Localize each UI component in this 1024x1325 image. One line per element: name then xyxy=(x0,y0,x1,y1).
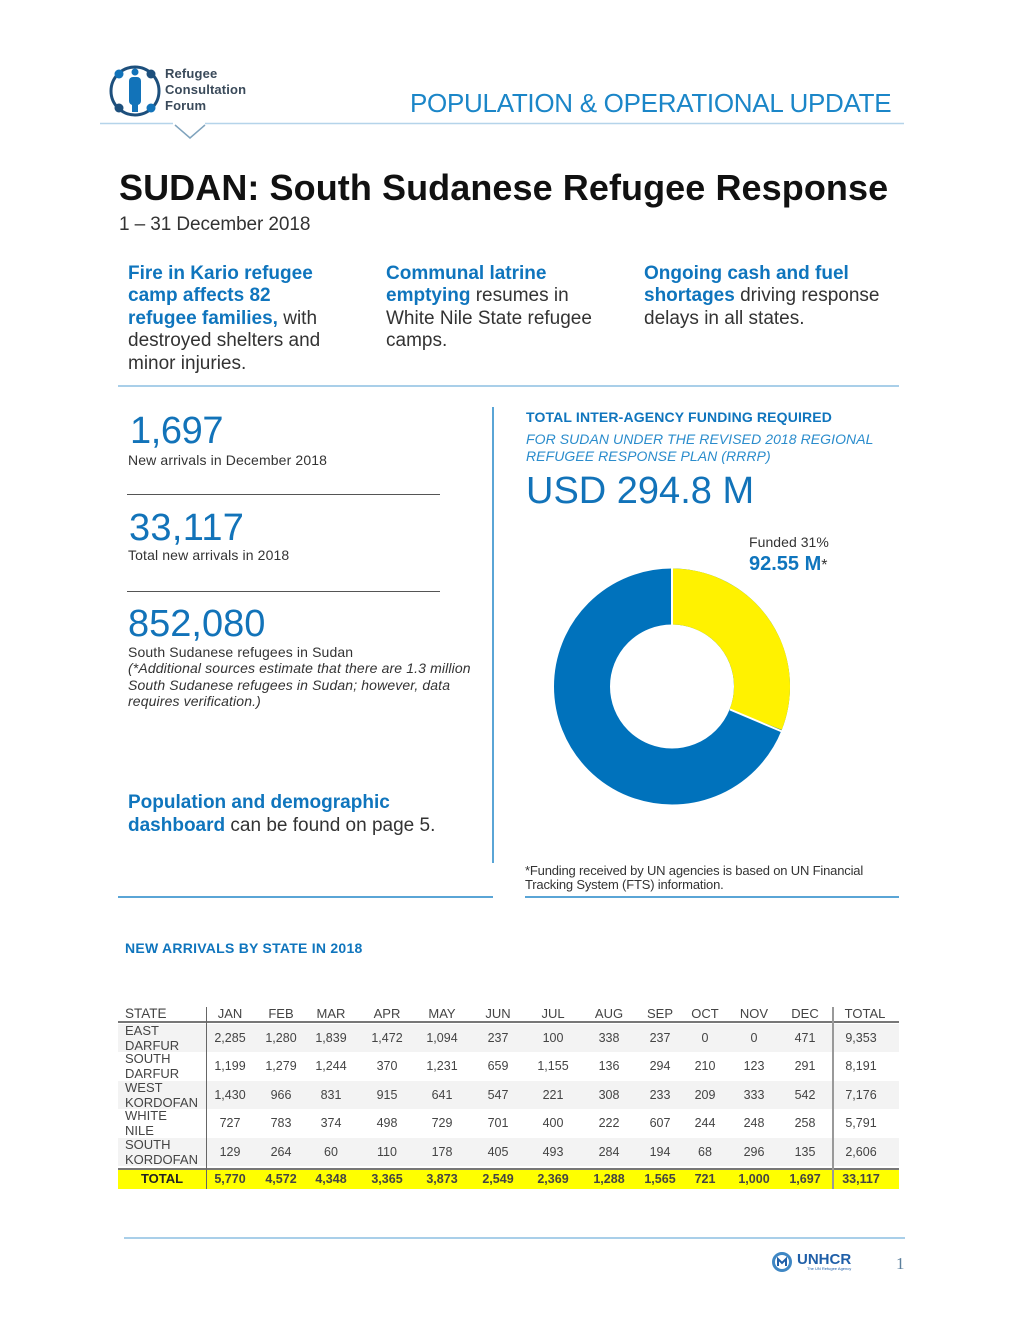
row: South Darfur: 1,155 xyxy=(537,1059,569,1073)
row: South Kordofan: 2,606 xyxy=(845,1145,877,1159)
highlight: latrine emptying: emptying resumes in xyxy=(386,285,569,306)
row: West Kordofan: 542 xyxy=(795,1088,815,1102)
row: White Nile: 729 xyxy=(432,1116,452,1130)
row: South Kordofan: SOUTH KORDOFAN xyxy=(125,1137,198,1166)
row: South Kordofan: 68 xyxy=(698,1145,712,1159)
row: East Darfur: EAST DARFUR xyxy=(125,1023,179,1052)
dashboard note: dashboard can be found on page 5. xyxy=(128,815,435,836)
row: total: 5,770 xyxy=(214,1172,246,1186)
table header: MAR xyxy=(317,1006,345,1021)
highlight: latrine emptying: camps. xyxy=(386,330,447,351)
row: East Darfur: 0 xyxy=(751,1031,757,1045)
dashboard note: Population and demographic xyxy=(128,792,390,813)
row: South Darfur: 1,199 xyxy=(214,1059,246,1073)
row: South Darfur: 8,191 xyxy=(845,1059,877,1073)
funding footnote xyxy=(525,863,863,892)
highlight: fire in Kario: minor injuries. xyxy=(128,353,246,374)
row: South Kordofan: 296 xyxy=(744,1145,764,1159)
row: total: 3,873 xyxy=(426,1172,458,1186)
row: South Darfur: 1,231 xyxy=(426,1059,458,1073)
highlight: fire in Kario xyxy=(128,263,320,374)
row: total: 1,565 xyxy=(644,1172,676,1186)
row: total: TOTAL xyxy=(141,1171,183,1186)
header rule with chevron xyxy=(100,122,904,139)
row: South Kordofan: 135 xyxy=(795,1145,815,1159)
highlight: cash and fuel shortages: Ongoing cash and fuel xyxy=(644,263,849,284)
stat: South Sudanese refugees in Sudan: 852,080 xyxy=(128,603,265,645)
row: East Darfur: 1,094 xyxy=(426,1031,458,1045)
stat: new arrivals December: New arrivals in December 2018 xyxy=(128,452,327,468)
row: West Kordofan: 221 xyxy=(543,1088,563,1102)
table header: FEB xyxy=(268,1006,294,1021)
highlight: fire in Kario: Fire in Kario refugee xyxy=(128,263,313,284)
row: West Kordofan: 209 xyxy=(695,1088,715,1102)
row: East Darfur: 9,353 xyxy=(845,1031,877,1045)
row: White Nile: 258 xyxy=(795,1116,815,1130)
row: South Darfur: 136 xyxy=(599,1059,619,1073)
row: East Darfur xyxy=(118,1024,899,1052)
row: South Kordofan: 60 xyxy=(324,1145,338,1159)
row: South Kordofan: 284 xyxy=(599,1145,619,1159)
row: South Kordofan: 264 xyxy=(271,1145,291,1159)
stat: South Sudanese refugees in Sudan: South Sudanese refugees in Sudan; however, data xyxy=(128,677,450,693)
funded label: Funded 31% xyxy=(749,534,829,550)
row: East Darfur: 1,839 xyxy=(315,1031,347,1045)
funding subheading: FOR SUDAN UNDER THE REVISED 2018 REGIONAL xyxy=(526,431,874,447)
row: South Darfur: 123 xyxy=(744,1059,764,1073)
header logo: Refugee Consultation Forum xyxy=(110,66,246,116)
row: East Darfur: 2,285 xyxy=(214,1031,246,1045)
row: East Darfur: 100 xyxy=(543,1031,563,1045)
header logo: Refugee Consultation Forum: Consultation xyxy=(165,82,246,97)
stat: total new arrivals: Total new arrivals in 2018 xyxy=(128,547,289,563)
row: White Nile: 244 xyxy=(695,1116,715,1130)
row: West Kordofan: 966 xyxy=(271,1088,291,1102)
highlight: latrine emptying: White Nile State refugee xyxy=(386,308,592,329)
row: total: 4,572 xyxy=(265,1172,297,1186)
row: West Kordofan: 1,430 xyxy=(214,1088,246,1102)
table header: MAY xyxy=(428,1006,456,1021)
row: West Kordofan: 641 xyxy=(432,1088,452,1102)
highlight: latrine emptying xyxy=(386,263,592,351)
row: White Nile: 607 xyxy=(650,1116,670,1130)
table header: OCT xyxy=(691,1006,719,1021)
UNHCR logo xyxy=(772,1251,852,1272)
table header: JUN xyxy=(485,1006,511,1021)
table header: SEP xyxy=(647,1006,673,1021)
date: 1 – 31 December 2018 xyxy=(119,214,310,235)
table: new arrivals by state xyxy=(118,1006,899,1189)
row: White Nile: 783 xyxy=(271,1116,291,1130)
header logo: Refugee Consultation Forum: Forum xyxy=(165,98,206,113)
highlight: cash and fuel shortages: delays in all states. xyxy=(644,308,805,329)
row: White Nile: 5,791 xyxy=(845,1116,877,1130)
stat: South Sudanese refugees in Sudan: requires verification.) xyxy=(128,693,261,709)
row: East Darfur: 471 xyxy=(795,1031,815,1045)
highlight: cash and fuel shortages xyxy=(644,263,880,329)
row: South Darfur: 291 xyxy=(795,1059,815,1073)
row: East Darfur: 237 xyxy=(650,1031,670,1045)
donut chart: funded 31% xyxy=(554,568,790,804)
stat: South Sudanese refugees in Sudan: (*Additional sources estimate that there are 1.3 million xyxy=(128,660,471,676)
row: South Darfur: SOUTH DARFUR xyxy=(125,1051,179,1080)
row: total: 1,697 xyxy=(789,1172,821,1186)
row: total: 4,348 xyxy=(315,1172,347,1186)
row: total: 1,288 xyxy=(593,1172,625,1186)
header logo: Refugee Consultation Forum: Refugee xyxy=(165,66,217,81)
stat: South Sudanese refugees in Sudan: South Sudanese refugees in Sudan xyxy=(128,644,353,660)
funded label: 92.55 M* xyxy=(749,553,828,575)
row: West Kordofan: 308 xyxy=(599,1088,619,1102)
row: White Nile xyxy=(125,1108,877,1138)
row: total: 721 xyxy=(695,1172,715,1186)
row: total xyxy=(118,1168,899,1189)
highlight: fire in Kario: destroyed shelters and xyxy=(128,330,320,351)
row: South Kordofan xyxy=(118,1138,899,1166)
table heading: NEW ARRIVALS BY STATE IN 2018 xyxy=(125,940,363,956)
header title: POPULATION & OPERATIONAL UPDATE xyxy=(410,88,891,118)
row: East Darfur: 0 xyxy=(702,1031,708,1045)
table header: NOV xyxy=(740,1006,768,1021)
table header: AUG xyxy=(595,1006,623,1021)
row: White Nile: 498 xyxy=(377,1116,397,1130)
row: East Darfur: 237 xyxy=(488,1031,508,1045)
dashboard note xyxy=(128,792,435,836)
funding total: USD 294.8 M xyxy=(526,470,754,512)
page number: 1 xyxy=(896,1254,904,1273)
funding heading: TOTAL INTER-AGENCY FUNDING REQUIRED xyxy=(526,409,832,425)
row: East Darfur: 1,280 xyxy=(265,1031,297,1045)
row: total: 2,369 xyxy=(537,1172,569,1186)
row: West Kordofan: 915 xyxy=(377,1088,397,1102)
row: South Kordofan: 493 xyxy=(543,1145,563,1159)
table header: STATE xyxy=(125,1006,167,1021)
row: White Nile: 701 xyxy=(488,1116,508,1130)
row: East Darfur: 1,472 xyxy=(371,1031,403,1045)
main title: SUDAN: South Sudanese Refugee Response xyxy=(119,167,888,208)
table header: TOTAL xyxy=(845,1006,885,1021)
row: South Darfur xyxy=(125,1051,877,1080)
table header: JAN xyxy=(218,1006,242,1021)
highlight: cash and fuel shortages: shortages driving response xyxy=(644,285,880,306)
row: White Nile: 727 xyxy=(220,1116,240,1130)
row: South Kordofan: 110 xyxy=(377,1145,397,1159)
row: total: 1,000 xyxy=(738,1172,770,1186)
highlight: latrine emptying: Communal latrine xyxy=(386,263,546,284)
row: South Darfur: 1,279 xyxy=(265,1059,297,1073)
funding subheading: REFUGEE RESPONSE PLAN (RRRP) xyxy=(526,448,771,464)
row: White Nile: 400 xyxy=(543,1116,563,1130)
table header xyxy=(118,1005,899,1023)
row: White Nile: 248 xyxy=(744,1116,764,1130)
row: total: 3,365 xyxy=(371,1172,403,1186)
funded label xyxy=(749,534,829,575)
row: South Kordofan: 194 xyxy=(650,1145,670,1159)
row: West Kordofan: 333 xyxy=(744,1088,764,1102)
highlight: fire in Kario: refugee families, with xyxy=(128,308,317,329)
stat: new arrivals December: 1,697 xyxy=(130,410,223,452)
row: South Kordofan: 405 xyxy=(488,1145,508,1159)
row: White Nile: 222 xyxy=(599,1116,619,1130)
row: White Nile: 374 xyxy=(321,1116,341,1130)
stat: total new arrivals xyxy=(128,507,289,563)
UNHCR logo: UNHCR xyxy=(797,1251,851,1268)
row: West Kordofan: 7,176 xyxy=(845,1088,877,1102)
row: South Darfur: 659 xyxy=(488,1059,508,1073)
row: White Nile: WHITE NILE xyxy=(125,1108,167,1138)
UNHCR logo: The UN Refugee Agency xyxy=(807,1266,851,1271)
row: West Kordofan: 831 xyxy=(321,1088,341,1102)
funding footnote: *Funding received by UN agencies is based on UN Financial xyxy=(525,863,863,878)
table header: DEC xyxy=(791,1006,819,1021)
row: West Kordofan xyxy=(118,1081,899,1109)
funding subheading xyxy=(526,431,874,464)
row: West Kordofan: WEST KORDOFAN xyxy=(125,1080,198,1110)
row: total: 33,117 xyxy=(842,1172,880,1186)
row: East Darfur: 338 xyxy=(599,1031,619,1045)
stat: total new arrivals: 33,117 xyxy=(129,507,244,549)
row: South Kordofan: 178 xyxy=(432,1145,452,1159)
table header: JUL xyxy=(541,1006,565,1021)
row: West Kordofan: 547 xyxy=(488,1088,508,1102)
stat: new arrivals December xyxy=(128,410,327,468)
highlight: fire in Kario: camp affects 82 xyxy=(128,285,271,306)
table header: APR xyxy=(374,1006,400,1021)
stat: South Sudanese refugees in Sudan xyxy=(128,603,471,709)
row: South Darfur: 370 xyxy=(377,1059,397,1073)
row: West Kordofan: 233 xyxy=(650,1088,670,1102)
row: South Kordofan: 129 xyxy=(220,1145,240,1159)
row: South Darfur: 1,244 xyxy=(315,1059,347,1073)
funding footnote: Tracking System (FTS) information. xyxy=(525,877,724,892)
row: total: 2,549 xyxy=(482,1172,514,1186)
row: South Darfur: 210 xyxy=(695,1059,715,1073)
row: South Darfur: 294 xyxy=(650,1059,670,1073)
